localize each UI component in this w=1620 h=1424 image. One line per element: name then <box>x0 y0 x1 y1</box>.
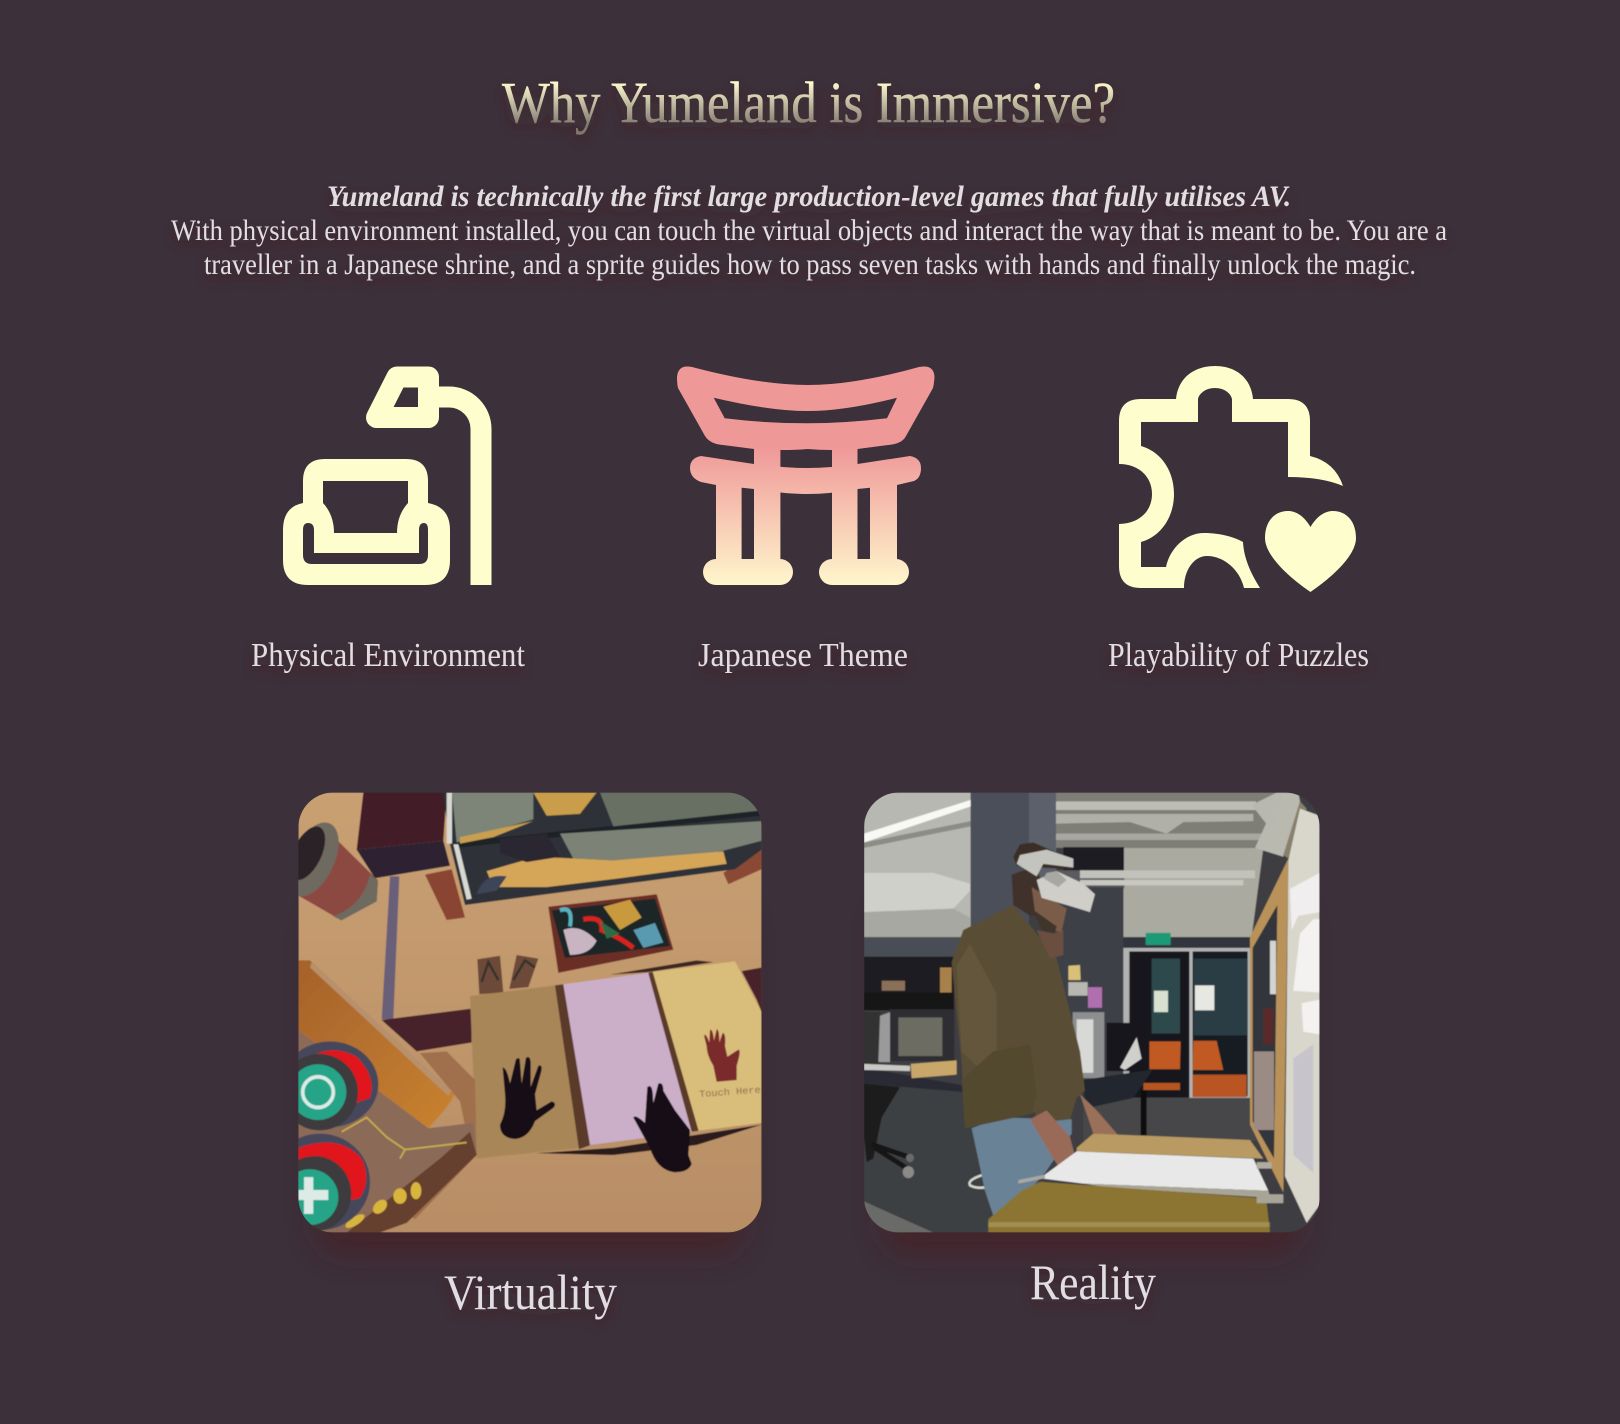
panel: reality scene <box>864 792 1320 1232</box>
caption: reality: Reality <box>1030 1254 1156 1310</box>
icon labels <box>251 637 1369 674</box>
icon labels: Physical Environment <box>251 637 525 674</box>
intro text block: traveller in a Japanese shrine, and a sprite guides how to pass seven tasks with hands and finally unlock the magic. <box>204 248 1416 281</box>
icon: puzzle piece with heart <box>1119 366 1356 592</box>
photo shadows <box>316 900 1301 1255</box>
icon labels: Japanese Theme <box>698 637 908 674</box>
icon: torii gate <box>677 366 934 585</box>
intro text block <box>171 180 1447 281</box>
panel: virtuality scene <box>270 792 762 1232</box>
title: Why Yumeland is Immersive? <box>502 70 1115 135</box>
icon labels: Playability of Puzzles <box>1108 637 1369 674</box>
intro text block: With physical environment installed, you can touch the virtual objects and interact the way that is meant to be. You are a <box>171 214 1447 247</box>
icon: lamp and sofa <box>283 377 481 585</box>
panel: virtuality scene: Touch Here <box>699 1084 761 1100</box>
intro text block: Yumeland is technically the first large production-level games that fully utilises AV. <box>327 180 1291 213</box>
caption: virtuality: Virtuality <box>444 1264 617 1320</box>
